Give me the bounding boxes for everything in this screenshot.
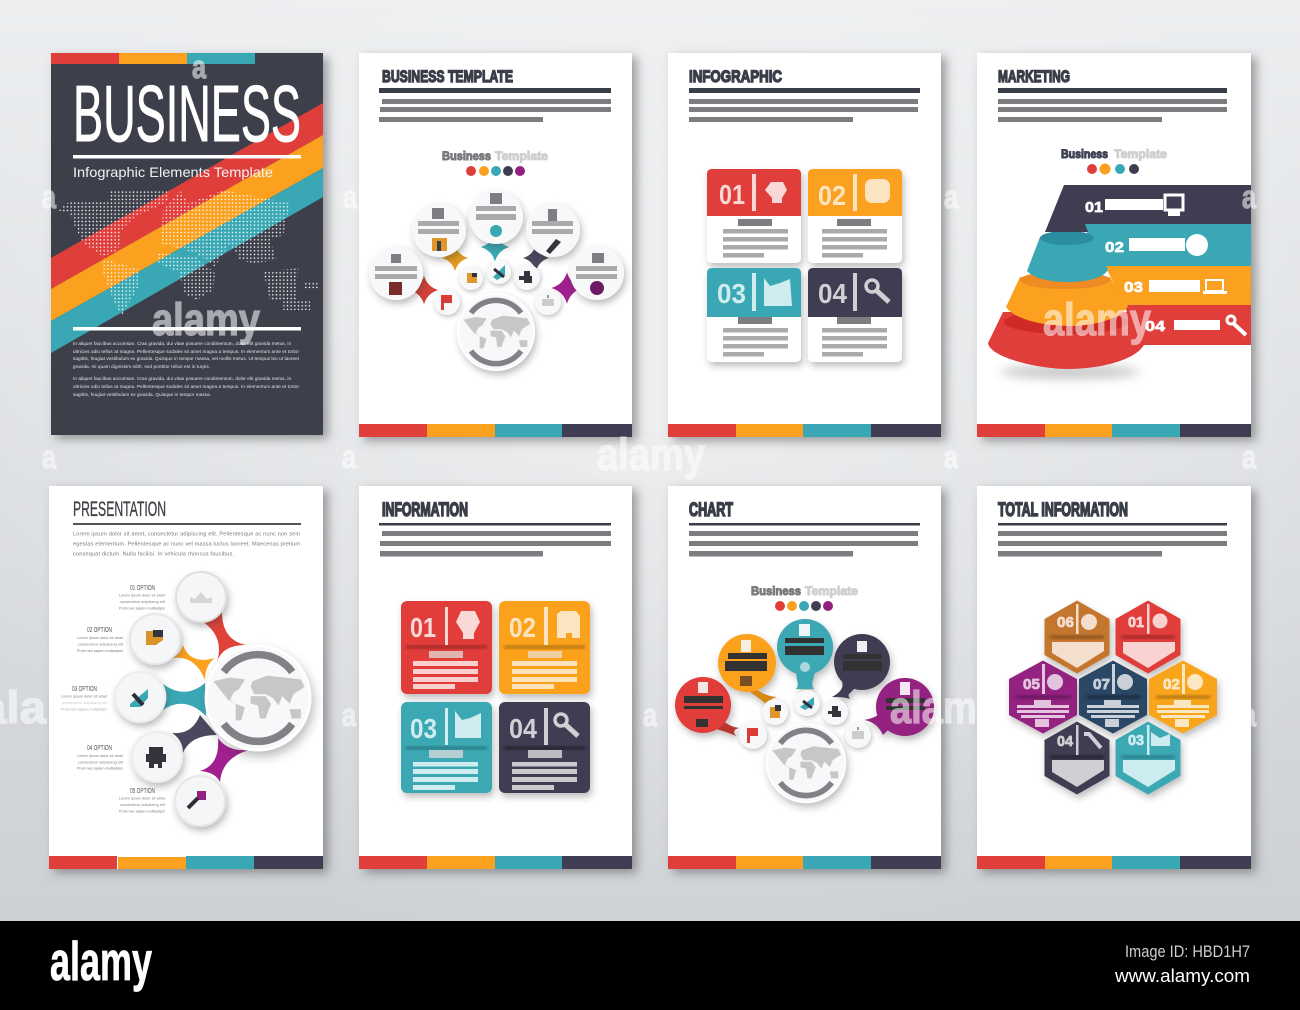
panel: presentation page <box>49 486 323 869</box>
watermarks: a <box>42 439 56 475</box>
heading: MARKETING <box>998 67 1070 86</box>
option 05: consectetur adipiscing elit <box>120 803 165 807</box>
watermarks: alamy <box>890 682 998 733</box>
watermarks: a <box>42 179 56 215</box>
speech bubbles <box>675 619 934 736</box>
option 03: Proin nec sapien multiadipis <box>61 708 107 712</box>
watermarks: a <box>342 697 356 733</box>
option 03: Lorem ipsum dolor sit amet <box>61 694 107 698</box>
footer logo: alamy <box>50 930 152 992</box>
footer colour strip <box>977 856 1251 869</box>
connectors <box>163 612 249 782</box>
text block <box>379 88 611 122</box>
red bubble <box>675 677 739 736</box>
purple bubble <box>864 678 934 736</box>
hexagon 02: 02 <box>1163 676 1180 693</box>
hexagon 06 <box>1044 600 1110 674</box>
card 02 <box>808 169 902 263</box>
subheading: Business <box>1061 147 1108 161</box>
option 05: Proin nec sapien multiadipis <box>119 810 165 814</box>
hexagon 07 <box>1079 660 1147 734</box>
card 04: 04 <box>818 278 847 309</box>
heading: CHART <box>689 500 733 521</box>
card 01 <box>401 601 492 694</box>
card 03: 03 <box>717 278 746 309</box>
option 02: consectetur adipiscing elit <box>78 642 123 646</box>
option 03 <box>61 672 165 722</box>
card 02: 02 <box>509 612 536 643</box>
footer colour strip <box>668 424 941 437</box>
option 01: Proin nec sapien multiadipis <box>119 606 165 610</box>
world globe <box>458 294 534 370</box>
cover body text: In aliquet faucibus accumsan. Cras gravida, dui vitae posuere condimentum, dolor elit gravida metus, in <box>73 341 291 346</box>
pyramid bands <box>1064 185 1251 345</box>
band 03: 03 <box>1124 279 1143 296</box>
cover body text: In aliquet faucibus accumsan. Cras gravida, dui vitae posuere condimentum, dolor elit gravida metus, in <box>73 376 291 381</box>
intro text: egestas elementum. Pellentesque ac nunc vel massa luctus laoreet. Maecenas pretium <box>73 542 300 548</box>
option circles <box>369 190 624 300</box>
watermarks: a <box>342 439 356 475</box>
watermarks: alamy <box>152 294 260 345</box>
watermarks: a <box>343 179 357 215</box>
hexagon 04 <box>1044 722 1110 794</box>
hexagon 05 <box>1009 660 1077 734</box>
hexagon 02 <box>1149 660 1217 734</box>
watermarks <box>0 49 1256 733</box>
red tier <box>988 312 1146 369</box>
text block <box>379 523 611 556</box>
text block <box>998 88 1227 122</box>
option 04: consectetur adipiscing elit <box>78 760 123 764</box>
card 04 <box>499 702 590 793</box>
intro text <box>73 532 300 558</box>
option 02: 02 OPTION <box>87 625 112 634</box>
hexagon 05: 05 <box>1023 676 1040 693</box>
card 04: 04 <box>509 713 537 744</box>
footer colour strip <box>977 424 1251 437</box>
small icon circles <box>739 690 871 749</box>
watermarks: a <box>643 697 657 733</box>
top colour strip <box>51 53 255 64</box>
option 01: consectetur adipiscing elit <box>120 600 165 604</box>
watermarks: a <box>1242 439 1256 475</box>
text block <box>689 88 920 122</box>
option 01 <box>119 572 226 622</box>
footer colour strip <box>49 856 323 869</box>
band 04: 04 <box>1145 318 1166 335</box>
cover rule <box>73 155 301 158</box>
card 02 <box>499 601 590 694</box>
intro text: Lorem ipsum dolor sit amet, consectetur adipiscing elit. Pellentesque ac nunc non sem <box>73 532 300 538</box>
subheading: Template <box>495 149 548 163</box>
option 04: Proin nec sapien multiadipis <box>77 766 123 770</box>
panel: information page <box>359 486 632 869</box>
heading: INFOGRAPHIC <box>689 67 782 86</box>
card 02: 02 <box>818 180 846 211</box>
panel: total information page <box>977 486 1251 869</box>
colour dots <box>466 166 525 176</box>
card 03: 03 <box>410 713 437 744</box>
heading: PRESENTATION <box>73 498 166 521</box>
subheading: Business <box>442 149 491 163</box>
card 04 <box>808 268 902 362</box>
hexagon 03: 03 <box>1128 732 1144 749</box>
hexagon 03 <box>1116 722 1180 794</box>
band 02: 02 <box>1105 239 1124 256</box>
hexagon 04: 04 <box>1057 733 1074 750</box>
heading: TOTAL INFORMATION <box>998 500 1128 521</box>
card 03 <box>707 268 801 362</box>
small icon circles <box>434 260 561 315</box>
option 04 <box>77 732 182 782</box>
watermarks: alamy <box>597 429 705 480</box>
dark bubble <box>832 634 890 699</box>
cone shadow <box>1000 365 1140 379</box>
footer colour strip <box>668 856 941 869</box>
footer colour strip <box>359 424 632 437</box>
hexagon 01 <box>1116 600 1180 674</box>
heading: INFORMATION <box>382 500 468 521</box>
watermarks: a <box>944 439 958 475</box>
watermarks: a <box>192 49 206 85</box>
world globe <box>206 646 310 750</box>
hexagon 06: 06 <box>1057 614 1074 631</box>
world globe <box>767 724 845 802</box>
cover subtitle: Infographic Elements Template <box>73 164 273 180</box>
option 05 <box>119 776 225 826</box>
card 01: 01 <box>719 179 745 210</box>
option 02: Proin nec sapien multiadipis <box>77 649 123 653</box>
card 01: 01 <box>410 612 436 643</box>
panel: cover page <box>51 53 323 435</box>
cover body text: sagittis, feugiat vestibulum ex gravida. Quisque in tempor massa, vel mollis metus. Ut tempus leo ut laoreet <box>73 356 300 361</box>
option 01: 01 OPTION <box>130 583 155 592</box>
card 03 <box>401 702 492 793</box>
text block <box>998 523 1227 556</box>
orange bubble <box>718 634 777 708</box>
connectors <box>410 233 583 304</box>
card 01 <box>707 169 801 263</box>
cover body text: sagittis, feugiat vestibulum ex gravida. Quisque in tempor massa. <box>73 392 211 397</box>
teal bubble <box>777 619 833 689</box>
subheading: Template <box>1114 147 1167 161</box>
hexagon 01: 01 <box>1128 614 1144 631</box>
band 01: 01 <box>1085 199 1103 216</box>
watermarks: a <box>1242 697 1256 733</box>
pyramid cone <box>988 185 1146 379</box>
option 04: 04 OPTION <box>87 743 112 752</box>
intro text: consequat dictum. Nulla facilisi. In vehicula rhoncus faucibus. <box>73 552 234 558</box>
option 01: Lorem ipsum dolor sit amet <box>119 594 165 598</box>
watermarks: a <box>944 179 958 215</box>
option 03: 03 OPTION <box>72 684 97 693</box>
option 05: 05 OPTION <box>130 786 155 795</box>
subheading: Business <box>751 584 801 598</box>
cover body text <box>73 341 300 397</box>
band 03 <box>1105 266 1251 305</box>
hexagon cluster <box>1009 600 1217 794</box>
teal tier <box>1027 237 1108 282</box>
band 02 <box>1083 224 1251 266</box>
text block <box>689 523 920 556</box>
website: www.alamy.com <box>1114 966 1250 986</box>
panel: infographic page <box>668 53 941 437</box>
subheading <box>1061 147 1167 161</box>
option 04: Lorem ipsum dolor sit amet <box>77 754 123 758</box>
dotted world map <box>57 190 318 317</box>
cover body text: gravida, mi quam dignissim nibh, sed porttitor tellus est in turpis. <box>73 364 210 369</box>
option 02: Lorem ipsum dolor sit amet <box>77 636 123 640</box>
colour dots <box>775 601 833 611</box>
footer colour strip <box>359 856 632 869</box>
subheading <box>751 584 858 598</box>
watermarks: alamy <box>1043 294 1151 345</box>
cover body text: ultricies odio tellus at magna. Pellentesque sodales sit amet magna a tempus. In elementum ante et tortor <box>73 349 299 354</box>
panel: business template page <box>359 53 632 437</box>
panel: chart page <box>668 486 941 869</box>
watermarks: a <box>1242 179 1256 215</box>
panel: marketing page <box>977 53 1251 437</box>
band 04 <box>1125 305 1251 345</box>
colour dots <box>1087 164 1139 174</box>
image id: Image ID: HBD1H7 <box>1125 942 1250 961</box>
cover body text: ultricies odio tellus at magna. Pellentesque sodales sit amet magna a tempus. In elementum ante et tortor <box>73 384 299 389</box>
footer bar <box>0 921 1300 1010</box>
option 03: consectetur adipiscing elit <box>62 701 107 705</box>
option 02 <box>77 614 180 664</box>
dark tier <box>1045 185 1088 232</box>
subheading: Template <box>805 584 858 598</box>
option 05: Lorem ipsum dolor sit amet <box>119 796 165 800</box>
heading: BUSINESS TEMPLATE <box>382 67 513 86</box>
cover lower rule <box>73 327 301 330</box>
band 01 <box>1064 185 1251 224</box>
diagonal stripes <box>51 103 323 353</box>
orange tier <box>1006 277 1128 326</box>
cover title: BUSINESS <box>73 69 301 158</box>
subheading <box>442 149 548 163</box>
hexagon 07: 07 <box>1093 676 1110 693</box>
